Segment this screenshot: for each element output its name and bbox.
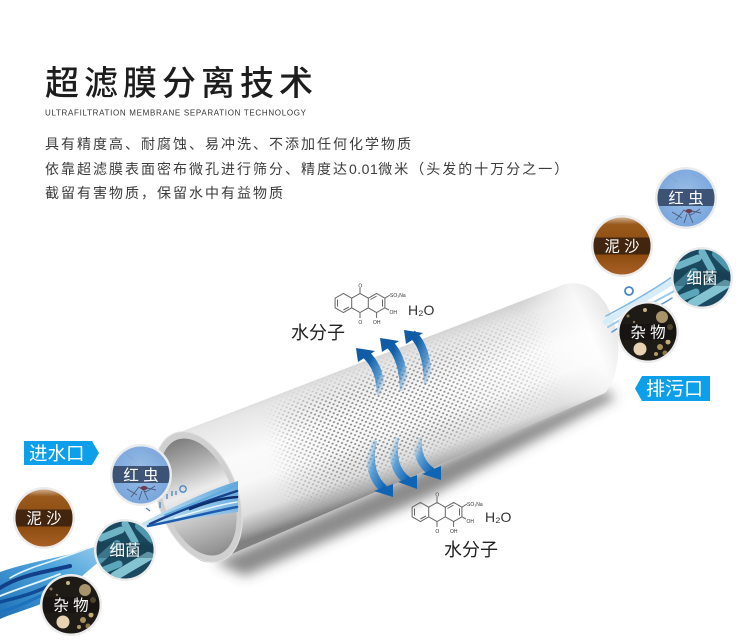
icon: inlet red worm <box>110 444 172 506</box>
icon: outlet impurities <box>617 301 679 363</box>
icon: outlet bacteria <box>671 247 733 309</box>
icon: outlet silt: 泥 沙 <box>604 238 640 256</box>
icon: inlet bacteria: 细菌 <box>109 542 141 560</box>
molecule: bottom: O <box>435 529 439 535</box>
label: H2O bottom: H₂O <box>485 509 512 525</box>
pipe interior <box>145 428 251 566</box>
arrows: water passing out of bottom <box>371 437 441 497</box>
text block: description: 依靠超滤膜表面密布微孔进行筛分、精度达0.01微米（头发的十万分之一） <box>45 161 570 177</box>
pipe rim <box>137 419 259 575</box>
molecule: top: O <box>358 320 362 326</box>
label: water inlet <box>24 441 99 465</box>
molecule: bottom: OH <box>466 519 474 525</box>
icon: inlet impurities <box>40 574 102 636</box>
pipe body <box>163 283 618 562</box>
icon: inlet silt: 泥 沙 <box>26 510 62 528</box>
molecule: top: O <box>358 284 362 290</box>
molecule: top: SO₃Na <box>390 293 406 299</box>
molecule: top: OH <box>373 320 381 326</box>
arrows: water passing out of top <box>356 330 428 395</box>
icon: inlet impurities: 杂 物 <box>53 596 89 614</box>
molecule: bottom <box>412 492 483 535</box>
label: sewage outlet: 排污口 <box>646 378 703 400</box>
text block: description <box>45 136 570 201</box>
text block: description: 截留有害物质，保留水中有益物质 <box>45 185 285 201</box>
icon: outlet red worm <box>655 167 717 229</box>
label: water inlet: 进水口 <box>29 443 85 464</box>
icon: inlet silt <box>13 487 75 549</box>
water stream: inlet <box>0 481 238 619</box>
icon: outlet impurities: 杂 物 <box>630 324 666 342</box>
icon: outlet bacteria: 细菌 <box>686 270 718 288</box>
label: water molecule bottom: 水分子 <box>444 540 498 560</box>
text block: description: 具有精度高、耐腐蚀、易冲洗、不添加任何化学物质 <box>45 136 413 152</box>
icon: outlet silt <box>591 215 653 277</box>
molecule: bottom: SO₃Na <box>467 502 483 508</box>
label: sewage outlet <box>635 376 710 401</box>
molecule: bottom: OH <box>450 529 458 535</box>
membrane pipe <box>137 280 618 575</box>
perforated membrane dots <box>268 317 555 503</box>
subtitle: ULTRAFILTRATION MEMBRANE SEPARATION TECHNOLOGY <box>45 108 307 118</box>
label: water molecule top: 水分子 <box>291 323 345 343</box>
pipe shadow <box>215 390 616 576</box>
icon: outlet red worm: 红 虫 <box>668 190 704 208</box>
molecule: top <box>335 284 406 326</box>
icon: inlet red worm: 红 虫 <box>123 466 159 484</box>
label: H2O top: H₂O <box>408 302 435 318</box>
title: 超滤膜分离技术 <box>45 65 318 103</box>
icon: inlet bacteria <box>94 519 156 581</box>
molecule: top: OH <box>390 310 397 316</box>
pipe end shading <box>163 283 618 562</box>
water stream: outlet <box>606 277 676 332</box>
molecule: bottom: O <box>435 492 439 498</box>
